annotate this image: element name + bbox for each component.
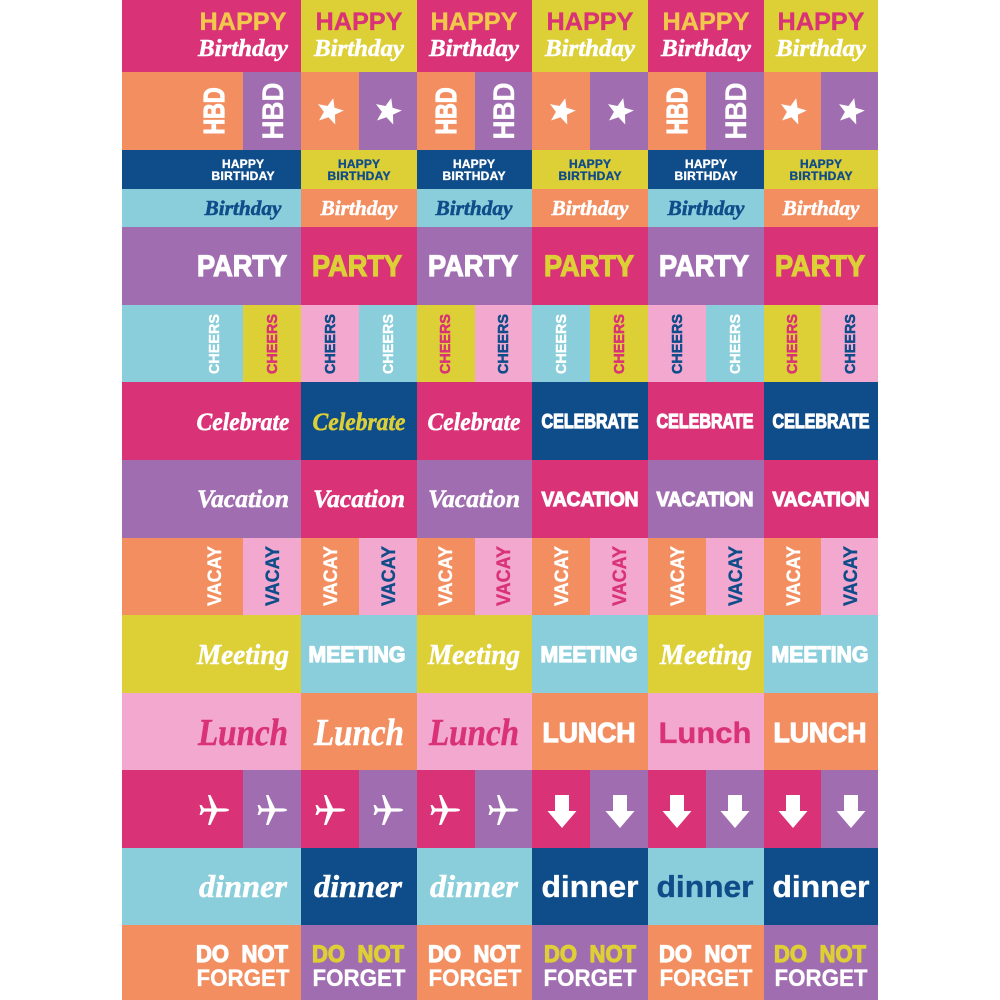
- row 1: Happy Birthday: [122, 0, 878, 72]
- sticker 3: Birthday: [428, 36, 519, 62]
- row 8: Vacation: [122, 460, 878, 538]
- HBD label: HBD: [488, 82, 521, 140]
- sticker 4: VACATION: [542, 489, 638, 511]
- sticker 3: [428, 8, 519, 62]
- sticker 6: DO NOT: [774, 941, 866, 968]
- sticker 5: Birthday: [666, 196, 745, 220]
- sticker 2: [312, 941, 406, 992]
- row 5: Party: [122, 227, 878, 305]
- sticker 4: Birthday: [550, 196, 629, 220]
- label: VACAY: [436, 546, 457, 606]
- sticker 5: VACATION: [656, 489, 754, 511]
- label: CHEERS: [842, 314, 859, 374]
- label: VACAY: [668, 546, 689, 606]
- row 2: HBD and stars: [122, 72, 878, 150]
- sticker 1: Vacation: [197, 486, 289, 513]
- sticker 1: HAPPY: [200, 8, 287, 36]
- HBD label: HBD: [257, 82, 290, 140]
- icon: star: [777, 95, 809, 126]
- sticker 4: LUNCH: [542, 717, 636, 748]
- row 6: Cheers: [122, 305, 878, 382]
- icon: star: [546, 95, 578, 126]
- label: VACAY: [205, 546, 226, 606]
- sticker 2: DO NOT: [312, 941, 404, 968]
- icon: plane: [200, 795, 229, 825]
- sticker 4: BIRTHDAY: [558, 169, 622, 183]
- sticker 6: [774, 941, 868, 992]
- sticker 4: MEETING: [540, 642, 638, 667]
- sticker 3: DO NOT: [428, 941, 520, 968]
- sticker 2: [313, 8, 404, 62]
- label: VACAY: [610, 546, 631, 606]
- sticker 1: Lunch: [197, 712, 288, 754]
- icon: arrow down: [606, 795, 634, 828]
- sticker 3: BIRTHDAY: [442, 169, 506, 183]
- sticker 6: dinner: [772, 869, 870, 904]
- sticker 4: Birthday: [544, 36, 635, 62]
- label: VACAY: [726, 546, 747, 606]
- sticker 5: Meeting: [659, 640, 752, 671]
- icon: arrow down: [548, 795, 576, 828]
- sticker 1: DO NOT: [196, 941, 288, 968]
- row 10: Meeting: [122, 615, 878, 693]
- icon: plane: [258, 795, 287, 825]
- sticker 6: LUNCH: [774, 717, 866, 748]
- sticker 4: HAPPY: [569, 157, 611, 171]
- row 9: Vacay: [122, 538, 878, 615]
- sticker 3: Birthday: [434, 196, 513, 220]
- sticker 1: Birthday: [203, 196, 282, 220]
- sticker 1: [196, 941, 290, 992]
- label: VACAY: [379, 546, 400, 606]
- row 11: Lunch: [122, 693, 878, 770]
- sticker 6: FORGET: [774, 965, 868, 992]
- sticker 2: dinner: [314, 868, 403, 904]
- sticker 6: [790, 157, 852, 183]
- sticker 5: [659, 941, 753, 992]
- sticker 1: dinner: [199, 868, 288, 904]
- label: VACAY: [784, 546, 805, 606]
- icon: star: [604, 95, 636, 126]
- sticker 1: Birthday: [197, 36, 288, 62]
- HBD stencil label: HBD: [431, 88, 463, 134]
- sticker 6: MEETING: [772, 642, 868, 667]
- sticker 5: FORGET: [660, 965, 753, 992]
- icon: star: [835, 95, 867, 126]
- label: CHEERS: [437, 314, 454, 374]
- sticker 3: dinner: [430, 868, 519, 904]
- sticker 4: [544, 8, 635, 62]
- sticker 5: BIRTHDAY: [674, 169, 738, 183]
- sticker 5: Birthday: [660, 36, 751, 62]
- sticker 1: BIRTHDAY: [212, 169, 274, 183]
- sticker 4: HAPPY: [546, 8, 634, 36]
- label: CHEERS: [553, 314, 570, 374]
- sticker 4: [558, 157, 622, 183]
- sticker 5: HAPPY: [662, 8, 750, 36]
- row 3: small Happy Birthday: [122, 150, 878, 189]
- sticker 4: [544, 941, 637, 992]
- sticker 5: dinner: [656, 869, 754, 904]
- icon: star: [372, 95, 404, 126]
- sticker 5: [660, 8, 751, 62]
- sticker 2: Birthday: [319, 196, 398, 220]
- icon: arrow down: [778, 795, 808, 828]
- sticker 3: Vacation: [428, 486, 520, 513]
- sticker 6: Birthday: [781, 196, 860, 220]
- label: CHEERS: [727, 314, 744, 374]
- sticker 3: [428, 941, 522, 992]
- sticker 3: PARTY: [428, 250, 518, 283]
- sticker 3: [442, 157, 506, 183]
- HBD stencil label: HBD: [662, 88, 694, 134]
- sticker 3: Celebrate: [428, 409, 520, 436]
- sticker 2: HAPPY: [338, 157, 380, 171]
- label: CHEERS: [264, 314, 281, 374]
- sticker 1: PARTY: [197, 250, 287, 283]
- sticker 2: PARTY: [312, 250, 402, 283]
- label: CHEERS: [611, 314, 628, 374]
- row 7: Celebrate: [122, 382, 878, 460]
- sticker 1: FORGET: [196, 965, 290, 992]
- label: CHEERS: [206, 314, 223, 374]
- icon: arrow down: [836, 795, 866, 828]
- HBD label: HBD: [720, 82, 753, 140]
- icon: plane: [488, 795, 518, 825]
- label: VACAY: [321, 546, 342, 606]
- sticker 2: [328, 157, 390, 183]
- icon: plane: [316, 795, 345, 825]
- sticker 6: HAPPY: [800, 157, 842, 171]
- label: CHEERS: [784, 314, 801, 374]
- sticker 6: PARTY: [775, 250, 865, 283]
- sticker 3: FORGET: [428, 965, 522, 992]
- sticker 2: BIRTHDAY: [328, 169, 390, 183]
- sticker 5: PARTY: [659, 250, 749, 283]
- sticker 5: [674, 157, 738, 183]
- sticker 3: Lunch: [428, 712, 519, 754]
- sticker 2: Lunch: [313, 712, 404, 754]
- icon: arrow down: [662, 795, 692, 828]
- icon: plane: [430, 795, 460, 825]
- sticker 1: [212, 157, 274, 183]
- sticker 4: FORGET: [544, 965, 637, 992]
- sticker 5: Lunch: [658, 717, 752, 750]
- sticker 6: VACATION: [772, 489, 870, 511]
- row 14: Do not forget: [122, 925, 878, 1000]
- row 12: planes and arrows: [122, 770, 878, 848]
- sticker 5: CELEBRATE: [656, 411, 754, 433]
- label: VACAY: [494, 546, 515, 606]
- sticker 4: PARTY: [544, 250, 634, 283]
- sticker 2: Celebrate: [312, 409, 406, 436]
- sticker 6: [775, 8, 866, 62]
- sticker 1: HAPPY: [222, 157, 264, 171]
- HBD stencil label: HBD: [199, 88, 231, 134]
- sticker 6: HAPPY: [778, 8, 865, 36]
- sticker 2: Vacation: [313, 486, 405, 513]
- sticker 6: CELEBRATE: [772, 411, 870, 433]
- sticker 2: FORGET: [312, 965, 406, 992]
- label: VACAY: [841, 546, 862, 606]
- icon: arrow down: [720, 795, 750, 828]
- icon: plane: [374, 795, 403, 825]
- sticker 1: Celebrate: [196, 409, 290, 436]
- sticker 1: [197, 8, 288, 62]
- sticker 2: HAPPY: [316, 8, 403, 36]
- sticker 4: CELEBRATE: [542, 411, 638, 433]
- sticker 4: dinner: [542, 869, 638, 904]
- sticker 2: MEETING: [308, 642, 406, 667]
- label: VACAY: [552, 546, 573, 606]
- sticker 3: HAPPY: [453, 157, 495, 171]
- sticker 3: Meeting: [427, 640, 520, 671]
- label: VACAY: [263, 546, 284, 606]
- label: CHEERS: [322, 314, 339, 374]
- label: CHEERS: [380, 314, 397, 374]
- icon: star: [314, 95, 346, 126]
- row 13: Dinner: [122, 848, 878, 925]
- sticker 5: DO NOT: [659, 941, 751, 968]
- sticker 2: Birthday: [313, 36, 404, 62]
- sticker 5: HAPPY: [685, 157, 727, 171]
- row 4: small Birthday: [122, 189, 878, 227]
- sticker 6: Birthday: [775, 36, 866, 62]
- sticker 4: DO NOT: [544, 941, 636, 968]
- label: CHEERS: [495, 314, 512, 374]
- sticker 1: Meeting: [196, 640, 289, 671]
- sticker 6: BIRTHDAY: [790, 169, 852, 183]
- sticker 3: HAPPY: [430, 8, 518, 36]
- label: CHEERS: [669, 314, 686, 374]
